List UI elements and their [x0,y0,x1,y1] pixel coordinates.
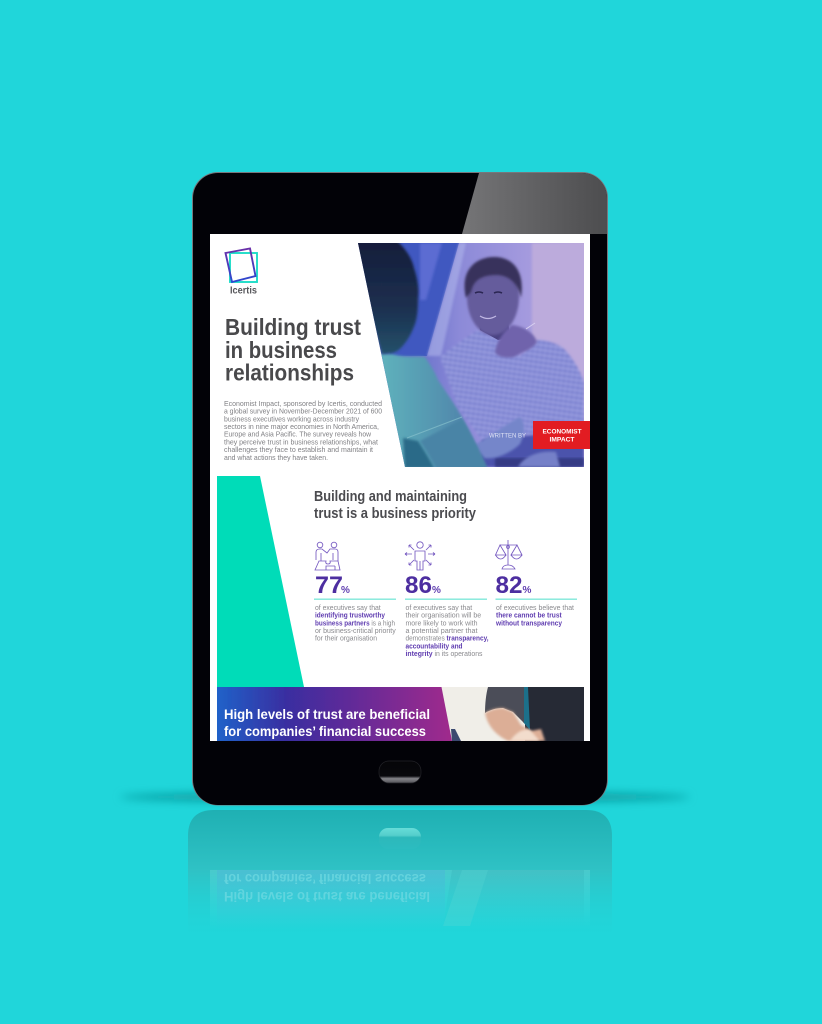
banner heading [224,707,430,739]
window light [532,243,564,346]
man's face [466,274,520,336]
tablet edge [192,172,608,806]
title: Building trust [225,314,361,340]
banner heading: for companies’ financial success [224,724,426,739]
title: relationships [225,360,354,386]
red badge [533,421,590,449]
logo mark [226,248,257,282]
grey sleeve [485,687,524,723]
icon: scales of justice [496,540,522,569]
pale glass strip [427,243,466,356]
photo backdrop [442,687,525,741]
number: 86 [405,572,432,599]
description: or business-critical priority [315,628,396,635]
ground shadow [120,792,690,802]
woman's hair [350,241,418,354]
photo background [358,243,584,467]
written by label: WRITTEN BY [489,432,527,440]
economist impact badge [533,421,590,449]
title [225,314,361,386]
intro paragraph [224,399,382,462]
rule [496,598,577,600]
rule [314,598,396,600]
reflected screen edge [210,870,590,930]
description: business partners is a high [315,620,395,627]
description [495,605,574,627]
blue wall [390,243,459,356]
intro paragraph: and what actions they have taken. [224,453,328,462]
woman's sleeve hem [407,417,462,438]
section heading [314,489,476,522]
description: a potential partner that [406,628,478,635]
description: of executives say that [406,605,472,612]
intro paragraph: a global survey in November-December 2021 of 600 [224,407,382,416]
reflected tablet body [188,810,612,945]
description: their organisation will be [406,613,481,620]
man's hair [465,257,522,298]
description: of executives believe that [496,605,574,612]
icon: person with arrows [405,542,435,570]
mint accent panel [217,476,304,687]
teal strip [523,687,530,730]
reflected sleeve [443,870,488,926]
description: accountability and [406,643,462,650]
percent sign: % [522,585,532,596]
screen glare [462,173,610,234]
description: of executives say that [315,605,381,612]
badge text: IMPACT [550,436,575,444]
woman's arm shadow [403,438,434,468]
woman's arm [420,419,487,468]
financial success banner [217,687,584,741]
logo wordmark: Icertis [230,284,257,296]
light wall stripe [420,243,442,300]
intro paragraph: sectors in nine major economies in North America, [224,422,379,431]
gradient panel [217,687,452,741]
stat: 86% [405,542,489,658]
reflected banner text: for companies’ financial success [224,871,426,886]
intro paragraph: Europe and Asia Pacific. The survey reveals how [224,430,372,439]
reflected home button [379,828,421,849]
rule [405,598,487,600]
icon: two people with puzzle [315,542,340,570]
number: 77 [315,572,343,599]
description: more likely to work with [406,620,478,627]
logo: Icertis [226,248,257,296]
description: identifying trustworthy [315,613,385,620]
dark strip by panel [451,729,461,741]
intro paragraph: Economist Impact, sponsored by Icertis, conducted [224,399,382,408]
man's right hand [518,452,560,467]
pen [526,323,535,329]
title: in business [225,337,337,363]
banner heading: High levels of trust are beneficial [224,707,430,722]
screen [210,234,590,741]
tablet reflection [188,810,612,945]
intro paragraph: business executives working across industry [224,414,359,423]
section heading: Building and maintaining [314,489,467,505]
reflected banner text [224,871,430,904]
description: for their organisation [315,636,377,643]
stat: 77% [314,542,396,643]
tablet mockup scene [124,172,686,926]
description: integrity in its operations [406,651,483,658]
man's hand [495,325,537,357]
man's eyes and smile [475,292,502,318]
man's lower body [480,432,584,467]
reflected banner text: High levels of trust are beneficial [224,889,430,904]
percent sign: % [341,585,350,596]
description: there cannot be trust [496,613,562,620]
number: 82 [496,572,522,599]
badge text [542,428,582,444]
hand highlight [510,729,540,741]
percent sign: % [432,585,441,596]
stat: 82% [495,540,577,627]
intro paragraph: challenges they face to establish and maintain it [224,445,373,454]
man's neck [480,326,509,340]
dark shirt [525,687,584,741]
intro paragraph: they perceive trust in business relationships, what [224,437,378,446]
woman's body [380,354,487,468]
white page [210,234,590,741]
tablet device [192,172,610,806]
tablet black body [193,173,607,805]
section heading: trust is a business priority [314,506,476,522]
hero photo [350,241,584,468]
arm and hand [485,708,545,741]
home button [379,761,421,783]
description: demonstrates transparency, [406,636,489,643]
description: without transparency [495,620,562,627]
reflected banner photo [443,870,584,926]
description [406,605,489,658]
man's left hand [474,417,524,458]
badge text: ECONOMIST [542,428,582,436]
banner photo [430,687,584,741]
description [315,605,396,643]
man's shirt [440,330,584,440]
reflected banner [217,870,445,928]
man's trousers [495,458,584,467]
